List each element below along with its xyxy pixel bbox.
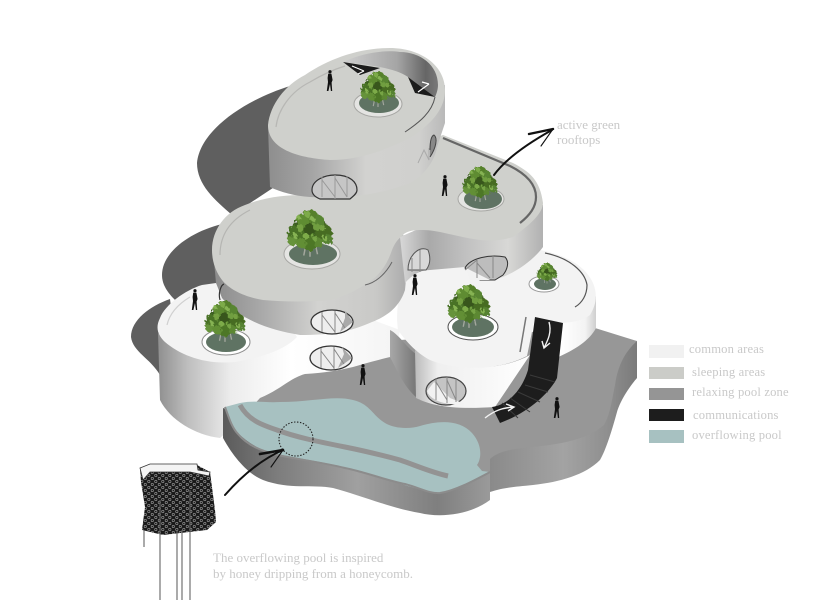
- caption: honey inspiration: by honey dripping from a honeycomb.: [213, 566, 413, 581]
- planter and tree: east roof: [458, 166, 504, 211]
- windows: [219, 135, 508, 405]
- second level walls: [213, 205, 543, 335]
- arrow: honeycomb to pool: [225, 450, 283, 495]
- legend: sleeping areas: sleeping areas: [692, 365, 765, 379]
- shadows: [131, 86, 300, 375]
- planter and tree: east terrace: [529, 263, 559, 292]
- relaxing pool zone base: [240, 328, 637, 492]
- legend: communications: [649, 408, 779, 422]
- sleeping areas floor level 2: [212, 135, 543, 302]
- legend: relaxing pool zone: relaxing pool zone: [692, 385, 789, 399]
- people silhouettes: [192, 70, 560, 418]
- planter and tree: upper roof: [284, 209, 340, 269]
- caption: honey inspiration: [213, 550, 413, 581]
- label: active green rooftops: [557, 117, 621, 147]
- rooftop stairs: [343, 62, 435, 97]
- legend: sleeping areas: [649, 365, 765, 379]
- top level wall: [268, 85, 445, 197]
- communications staircase: [485, 317, 563, 423]
- planter and tree: west terrace: [202, 300, 250, 355]
- caption: honey inspiration: The overflowing pool is inspired: [213, 550, 384, 565]
- label: active green rooftops: active green: [557, 117, 621, 132]
- overflowing pool: [223, 398, 490, 515]
- planter and tree: top roof: [354, 71, 402, 117]
- ground floor walls: [158, 296, 596, 438]
- arrow: to rooftops: [494, 129, 553, 175]
- legend: common areas: common areas: [689, 342, 764, 356]
- honeycomb illustration: [140, 464, 216, 600]
- top rooftop floor: [268, 48, 445, 160]
- legend: overflowing pool: [649, 428, 782, 443]
- legend: [649, 342, 789, 443]
- dotted detail circle: [279, 422, 313, 456]
- legend: common areas: [649, 342, 764, 358]
- planter and tree: central terrace: [448, 284, 498, 340]
- common area terraces: [158, 250, 596, 368]
- rooftop edge lines: [220, 138, 536, 285]
- legend: communications: communications: [693, 408, 779, 422]
- label: active green rooftops: rooftops: [557, 132, 600, 147]
- legend: relaxing pool zone: [649, 385, 789, 400]
- legend: overflowing pool: overflowing pool: [692, 428, 782, 442]
